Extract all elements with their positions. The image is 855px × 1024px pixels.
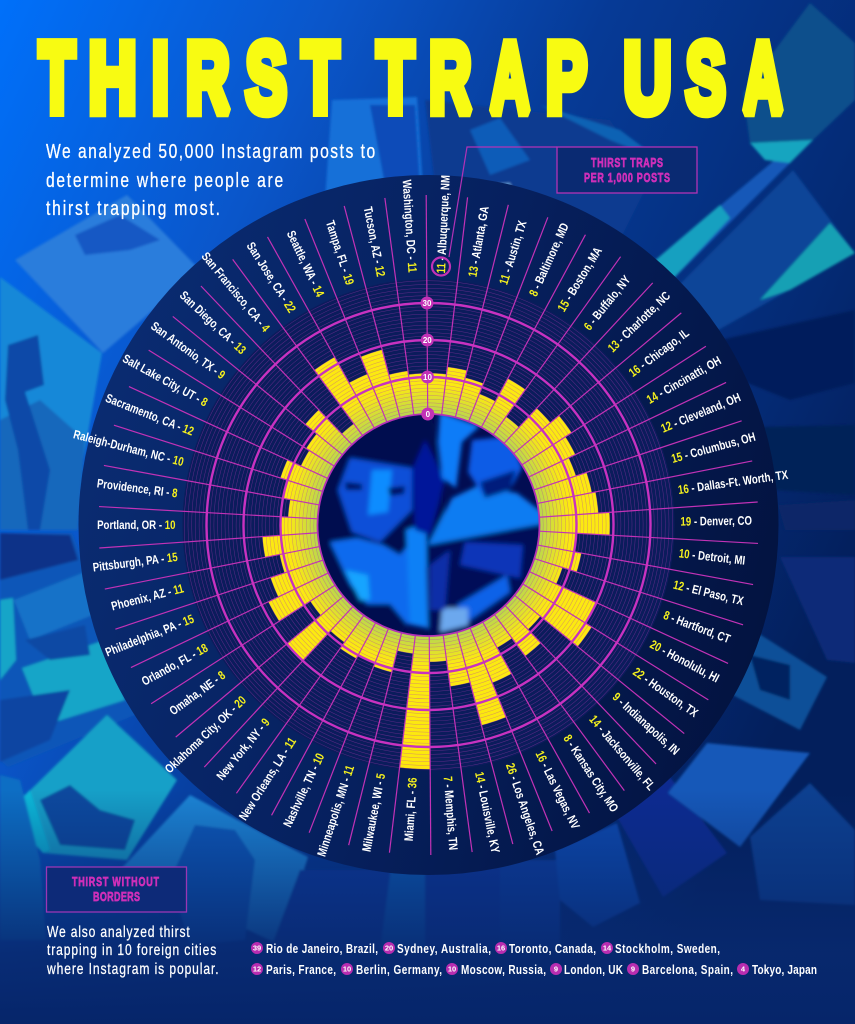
- title: [39, 22, 783, 134]
- city labels: right half: 15 - Columbus, OH: [670, 431, 757, 466]
- city labels: right half: 8 - Hartford, CT: [661, 609, 732, 647]
- foreign cities list: 10: [448, 965, 456, 974]
- city labels: left half: Sacramento, CA - 12: [103, 392, 195, 439]
- bottom fade: [0, 790, 855, 1024]
- foreign cities list: Rio de Janeiro, Brazil,: [266, 943, 378, 956]
- city labels: right half: 26 - Los Angeles, CA: [503, 762, 546, 857]
- foreign cities list: 9: [554, 965, 558, 974]
- box: thirst without borders: [46, 867, 186, 912]
- city labels: left half: San Diego, CA - 13: [177, 289, 248, 357]
- intro text: determine where people are: [46, 169, 283, 191]
- city labels: right half: 12 - Cleveland, OH: [659, 391, 743, 436]
- city labels: left half: Omaha, NE - 8: [167, 669, 228, 718]
- foreign cities list: Moscow, Russia,: [461, 964, 546, 977]
- title: S: [686, 23, 726, 134]
- city labels: right half: 16 - Las Vegas, NV: [532, 749, 582, 832]
- foreign cities intro text: We also analyzed thirst: [47, 923, 190, 940]
- foreign cities intro text: [46, 923, 219, 977]
- foreign cities list: Barcelona, Spain,: [642, 964, 733, 977]
- title: I: [152, 24, 169, 133]
- city labels: right half: 14 - Jacksonville, FL: [586, 713, 657, 794]
- lower photo: [460, 542, 523, 578]
- city labels: right half: 16 - Dallas-Ft. Worth, TX: [677, 469, 789, 497]
- city labels: left half: Tampa, FL - 19: [323, 219, 356, 287]
- radial bar chart: [97, 193, 760, 857]
- city labels: left half: New Orleans, LA - 11: [237, 735, 299, 823]
- title: U: [624, 22, 671, 133]
- city labels: right half: 7 - Memphis, TN: [440, 776, 459, 851]
- title: A: [743, 23, 783, 133]
- city labels: left half: Pittsburgh, PA - 15: [92, 551, 178, 575]
- title: R: [186, 24, 230, 133]
- title: S: [246, 23, 287, 133]
- city labels: right half: 8 - Baltimore, MD: [527, 221, 572, 299]
- foreign cities list: 20: [385, 944, 393, 953]
- city labels: left half: San Antonio, TX - 9: [148, 320, 227, 382]
- city labels: left half: Orlando, FL - 18: [140, 642, 210, 689]
- foreign cities list: Paris, France,: [266, 964, 336, 977]
- city labels: left half: Philadelphia, PA - 15: [104, 613, 196, 660]
- intro text: [46, 140, 375, 219]
- city labels: right half: 16 - Chicago, IL: [627, 326, 692, 380]
- city labels: right half: 13 - Charlotte, NC: [606, 289, 673, 355]
- city labels: left half: Phoenix, AZ - 11: [110, 582, 185, 614]
- city labels: right half: 6 - Buffalo, NY: [582, 273, 634, 333]
- box: thirst without borders: BORDERS: [93, 891, 140, 904]
- dark chart disc: [78, 175, 778, 875]
- city labels: right half: 19 - Denver, CO: [680, 515, 752, 529]
- city labels: right half: [435, 175, 789, 857]
- title: T: [302, 24, 339, 133]
- city labels: left half: Oklahoma City, OK - 20: [163, 694, 249, 776]
- city labels: left half: Minneapolis, MN - 11: [315, 764, 357, 858]
- city labels: left half: [72, 179, 420, 858]
- foreign cities list: Berlin, Germany,: [356, 964, 442, 977]
- scale tick badges: 30: [423, 299, 432, 308]
- city labels: left half: Raleigh-Durham, NC - 10: [72, 428, 185, 469]
- title: R: [429, 23, 471, 134]
- legend box: thirst traps per 1,000 posts: [432, 147, 697, 276]
- city labels: left half: New York, NY - 9: [214, 716, 273, 783]
- box: thirst without borders: THIRST WITHOUT: [72, 876, 159, 889]
- city labels: right half: 8 - Kansas City, MO: [560, 733, 621, 815]
- foreign cities list: Stockholm, Sweden,: [615, 943, 720, 956]
- legend box: thirst traps per 1,000 posts: PER 1,000 POSTS: [584, 172, 670, 185]
- legend box: thirst traps per 1,000 posts: THIRST TRAPS: [591, 157, 663, 170]
- woman: [328, 431, 446, 626]
- highlight circle on first value: [432, 258, 450, 276]
- city labels: right half: 15 - Boston, MA: [556, 245, 605, 314]
- foreign cities list: 39: [253, 944, 261, 953]
- center photo circle: [310, 400, 542, 640]
- foreign cities intro text: trapping in 10 foreign cities: [47, 941, 216, 958]
- city labels: right half: 20 - Honolulu, HI: [647, 638, 721, 686]
- foreign cities list: Sydney, Australia,: [397, 943, 491, 956]
- scale tick badges: 0: [426, 410, 431, 419]
- city labels: left half: Milwaukee, WI - 5: [360, 772, 389, 853]
- foreign cities list: 4: [741, 965, 746, 974]
- city labels: left half: Seattle, WA - 14: [283, 229, 326, 300]
- foreign cities list: 14: [603, 944, 612, 953]
- city labels: right half: 14 - Cincinatti, OH: [645, 354, 724, 407]
- scale tick badges: [420, 296, 434, 420]
- scale tick badges: 10: [423, 373, 432, 382]
- city labels: right half: 14 - Louisville, KY: [472, 771, 502, 855]
- city labels: right half: 11 - Albuquerque, NM: [435, 175, 453, 274]
- city labels: left half: San Francisco, CA - 4: [198, 250, 272, 335]
- inner chart area: [181, 277, 676, 773]
- title: T: [39, 23, 75, 134]
- foreign cities list: Tokyo, Japan: [752, 964, 817, 977]
- title: A: [490, 23, 530, 133]
- city labels: right half: 10 - Detroit, MI: [678, 547, 746, 568]
- intro text: We analyzed 50,000 Instagram posts to: [46, 140, 375, 162]
- city labels: left half: San Jose, CA - 22: [243, 240, 298, 315]
- city labels: left half: Washington, DC - 11: [399, 179, 418, 273]
- city labels: left half: Providence, RI - 8: [96, 477, 178, 501]
- city labels: left half: Miami, FL - 36: [403, 777, 420, 842]
- foreign cities intro text: where Instagram is popular.: [46, 960, 219, 977]
- city labels: left half: Nashville, TN - 10: [281, 751, 328, 830]
- foreign cities list: London, UK: [564, 964, 624, 977]
- foreign cities list: [251, 942, 817, 977]
- city labels: left half: Salt Lake City, UT - 8: [120, 352, 210, 410]
- foreign cities list: 10: [343, 965, 351, 974]
- city labels: left half: Portland, OR - 10: [97, 519, 176, 533]
- scale tick badges: 20: [423, 336, 432, 345]
- city labels: right half: 9 - Indianapolis, IN: [610, 691, 682, 758]
- foreign cities list: 12: [253, 965, 261, 974]
- title: T: [377, 24, 414, 133]
- intro text: thirst trapping most.: [46, 197, 220, 219]
- city labels: right half: 11 - Austin, TX: [497, 219, 530, 287]
- foreign cities list: Toronto, Canada,: [509, 943, 596, 956]
- foreign cities list: 9: [631, 965, 635, 974]
- title: P: [546, 23, 587, 133]
- man: [428, 486, 542, 545]
- city labels: right half: 13 - Atlanta, GA: [467, 205, 492, 278]
- city labels: right half: 22 - Houston, TX: [630, 665, 700, 721]
- foreign cities list: 16: [497, 944, 505, 953]
- city labels: left half: Tucson, AZ - 12: [360, 206, 387, 278]
- city labels: right half: 12 - El Paso, TX: [672, 579, 745, 609]
- yellow bars: thirst traps per 1,000 posts: [262, 350, 610, 770]
- title: H: [89, 22, 136, 133]
